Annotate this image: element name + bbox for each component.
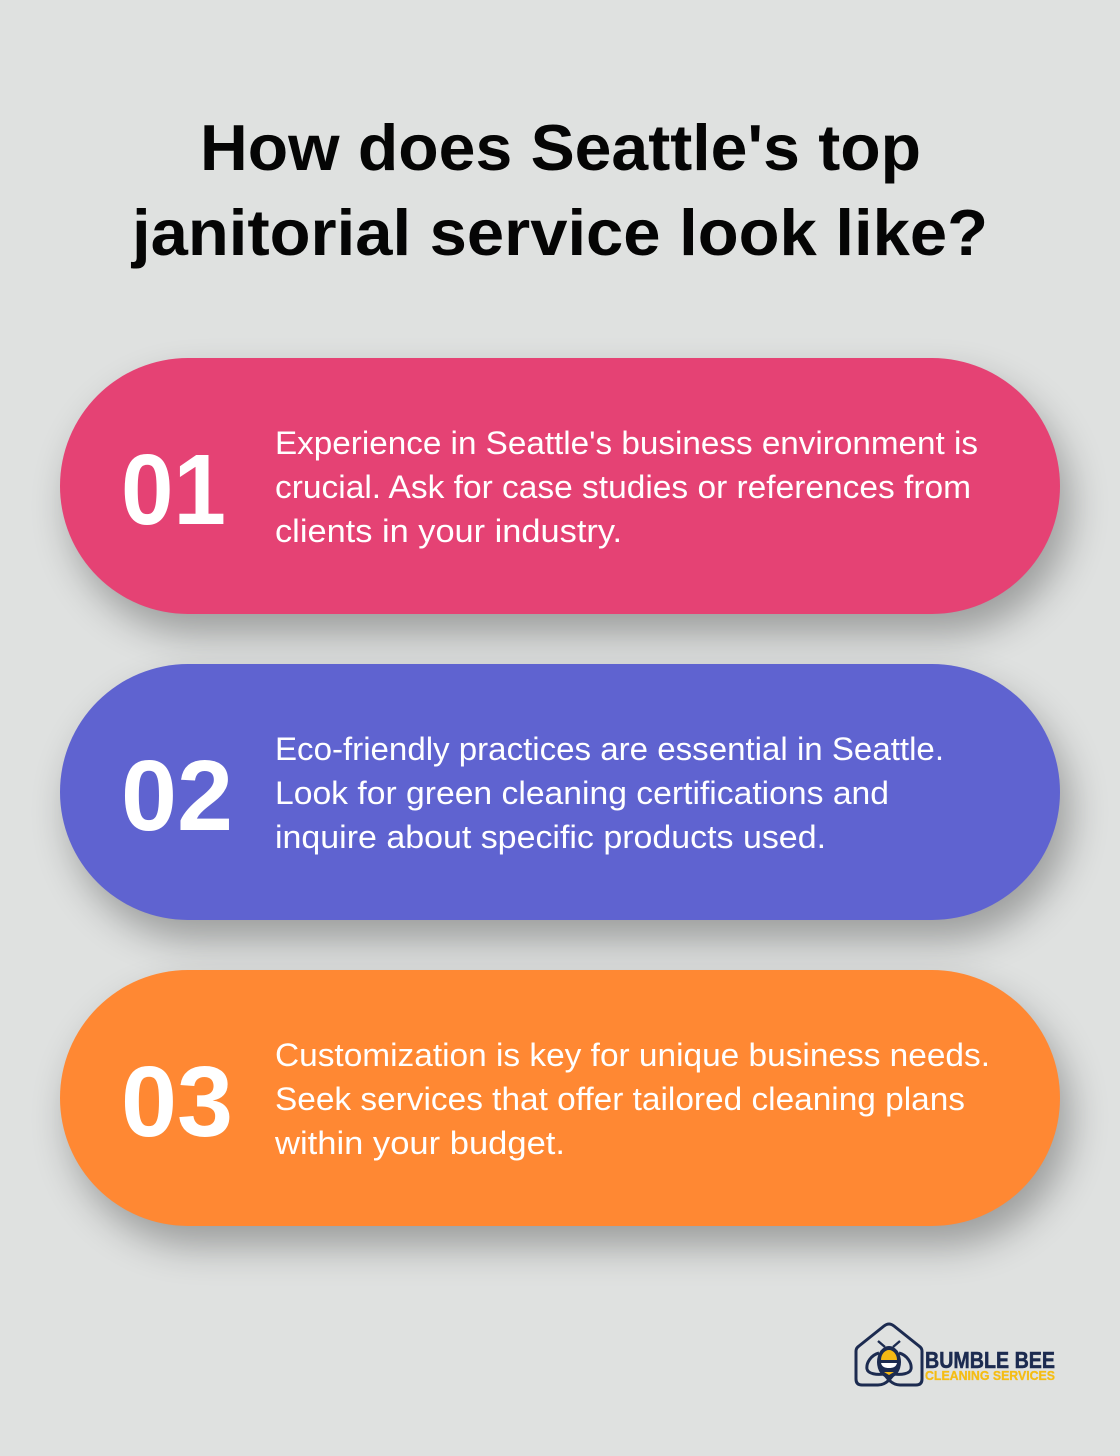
logo tagline: CLEANING SERVICES <box>925 1368 1055 1383</box>
step 03 text <box>274 1037 990 1161</box>
step 01 text: crucial. Ask for case studies or references from <box>275 469 971 505</box>
panel: step 01 <box>60 358 1060 614</box>
step 03 text: Seek services that offer tailored cleaning plans <box>275 1081 965 1117</box>
step 01 text: clients in your industry. <box>275 513 622 549</box>
logo name: BUMBLE BEE <box>925 1347 1055 1373</box>
step 01 text: Experience in Seattle's business environment is <box>275 425 978 461</box>
title: janitorial service look like? <box>130 196 988 269</box>
title: How does Seattle's top <box>200 111 921 184</box>
step 02 text: Eco-friendly practices are essential in Seattle. <box>275 731 944 767</box>
step 03 text: Customization is key for unique business needs. <box>275 1037 990 1073</box>
step 03 number: 03 <box>121 1046 233 1158</box>
step 01 text <box>275 425 978 549</box>
title <box>130 111 988 269</box>
step 01 number: 01 <box>121 434 226 546</box>
panel: step 02 <box>60 664 1060 920</box>
step 02 text: Look for green cleaning certifications and <box>275 775 889 811</box>
step 03 text: within your budget. <box>274 1125 565 1161</box>
panel: step 03 <box>60 970 1060 1226</box>
step 02 text: inquire about specific products used. <box>275 819 826 855</box>
step 02 number: 02 <box>121 740 233 852</box>
logo: Bumble Bee Cleaning Services <box>856 1324 1055 1385</box>
icon: house with bee <box>856 1324 922 1385</box>
step 02 text <box>275 731 944 855</box>
